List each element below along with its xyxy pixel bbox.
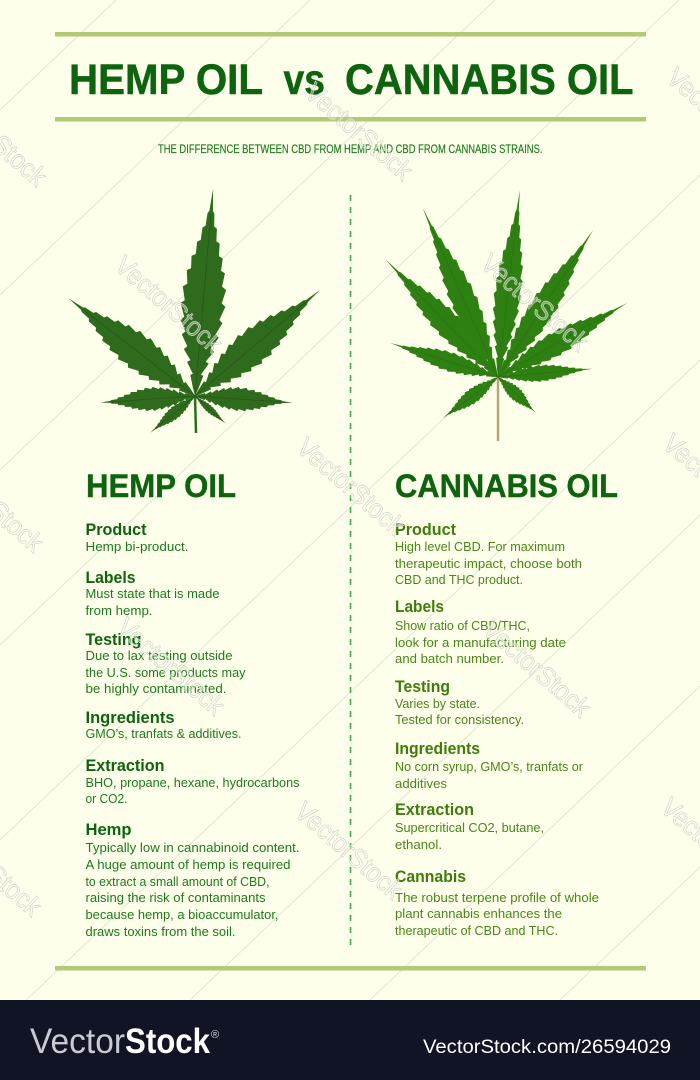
footer logo: ® (211, 1029, 219, 1041)
watermarks (0, 62, 700, 922)
item: extraction: Extraction (395, 800, 474, 819)
item: cannabis: Cannabis (395, 867, 466, 886)
item: ingredients (86, 708, 242, 741)
item: testing: Due to lax testing outside (86, 648, 232, 663)
item: labels: Must state that is made (86, 586, 220, 601)
title: HEMP OIL (69, 56, 263, 104)
item: product: Product (395, 520, 456, 539)
item: ingredients: additives (395, 776, 448, 791)
item: testing: the U.S. some products may (86, 665, 246, 680)
item: extraction (86, 756, 300, 806)
item: ingredients: No corn syrup, GMO’s, tranfats or (395, 759, 584, 774)
footer logo: Stock (125, 1022, 210, 1061)
footer logo: Vector (30, 1022, 125, 1061)
watermarks: VectorStock (109, 250, 229, 359)
item: extraction (395, 800, 544, 852)
top rule (55, 32, 646, 36)
item: hemp: to extract a small amount of CBD, (86, 874, 270, 889)
item: testing: Tested for consistency. (395, 712, 524, 727)
item: hemp: draws toxins from the soil. (86, 924, 236, 939)
item: hemp: raising the risk of contaminants (86, 890, 266, 905)
item: extraction: BHO, propane, hexane, hydrocarbons (86, 775, 300, 790)
heading: cannabis oil: CANNABIS OIL (395, 468, 618, 504)
item: testing (395, 677, 524, 727)
item: hemp (86, 820, 300, 939)
title block (55, 32, 646, 156)
footer bar (0, 1000, 700, 1080)
item: product (86, 520, 188, 554)
item: labels (395, 597, 566, 666)
item: labels: from hemp. (86, 603, 152, 618)
icon: cannabis leaf (376, 189, 633, 441)
item: testing (86, 630, 246, 696)
item: labels: Show ratio of CBD/THC, (395, 618, 530, 633)
watermarks: VectorStock (291, 432, 411, 541)
item: product: Hemp bi-product. (86, 539, 188, 554)
item: hemp: Typically low in cannabinoid content. (86, 840, 300, 855)
item: hemp: Hemp (86, 820, 132, 839)
footer url: VectorStock.com/26594029 (423, 1037, 671, 1058)
item: ingredients: Ingredients (395, 739, 480, 758)
subtitle: THE DIFFERENCE BETWEEN CBD FROM HEMP AND CBD FROM CANNABIS STRAINS. (158, 142, 542, 156)
item: hemp: because hemp, a bioaccumulator, (86, 907, 278, 922)
item: hemp: A huge amount of hemp is required (86, 857, 290, 872)
item: extraction: or CO2. (86, 791, 128, 806)
item: cannabis: plant cannabis enhances the (395, 906, 562, 921)
item: extraction: ethanol. (395, 837, 442, 852)
item: testing: Testing (395, 677, 450, 696)
item: product: therapeutic impact, choose both (395, 556, 582, 571)
bottom rule of title (55, 117, 646, 122)
item: labels: look for a manufacturing date (395, 635, 566, 650)
item: product: High level CBD. For maximum (395, 539, 565, 554)
dashed centre divider (350, 195, 352, 950)
item: cannabis (395, 867, 599, 938)
item: testing: be highly contaminated. (86, 681, 226, 696)
watermarks: VectorStock (299, 77, 419, 186)
item: extraction: Extraction (86, 756, 164, 775)
panel: hemp oil (86, 468, 300, 939)
item: product (395, 520, 582, 587)
item: cannabis: therapeutic of CBD and THC. (395, 923, 558, 938)
item: ingredients: Ingredients (86, 708, 174, 727)
watermarks: VectorStock (477, 614, 597, 723)
item: labels: Labels (86, 568, 136, 587)
icon: hemp leaf (57, 187, 332, 438)
watermarks: VectorStock (289, 796, 409, 905)
watermarks: VectorStock (475, 248, 595, 357)
item: labels (86, 568, 220, 618)
item: extraction: Supercritical CO2, butane, (395, 820, 544, 835)
item: testing: Varies by state. (395, 696, 480, 711)
item: testing: Testing (86, 630, 142, 649)
item: ingredients (395, 739, 584, 791)
item: product: CBD and THC product. (395, 572, 523, 587)
panel: cannabis oil (395, 468, 618, 938)
item: cannabis: The robust terpene profile of whole (395, 890, 599, 905)
item: labels: and batch number. (395, 651, 504, 666)
watermarks: VectorStock (111, 612, 231, 721)
heading: hemp oil: HEMP OIL (86, 468, 236, 504)
bottom rule (55, 966, 646, 970)
item: labels: Labels (395, 597, 444, 616)
item: ingredients: GMO’s, tranfats & additives. (86, 726, 242, 741)
title: vs (284, 56, 325, 104)
title: CANNABIS OIL (345, 56, 634, 104)
item: product: Product (86, 520, 147, 539)
